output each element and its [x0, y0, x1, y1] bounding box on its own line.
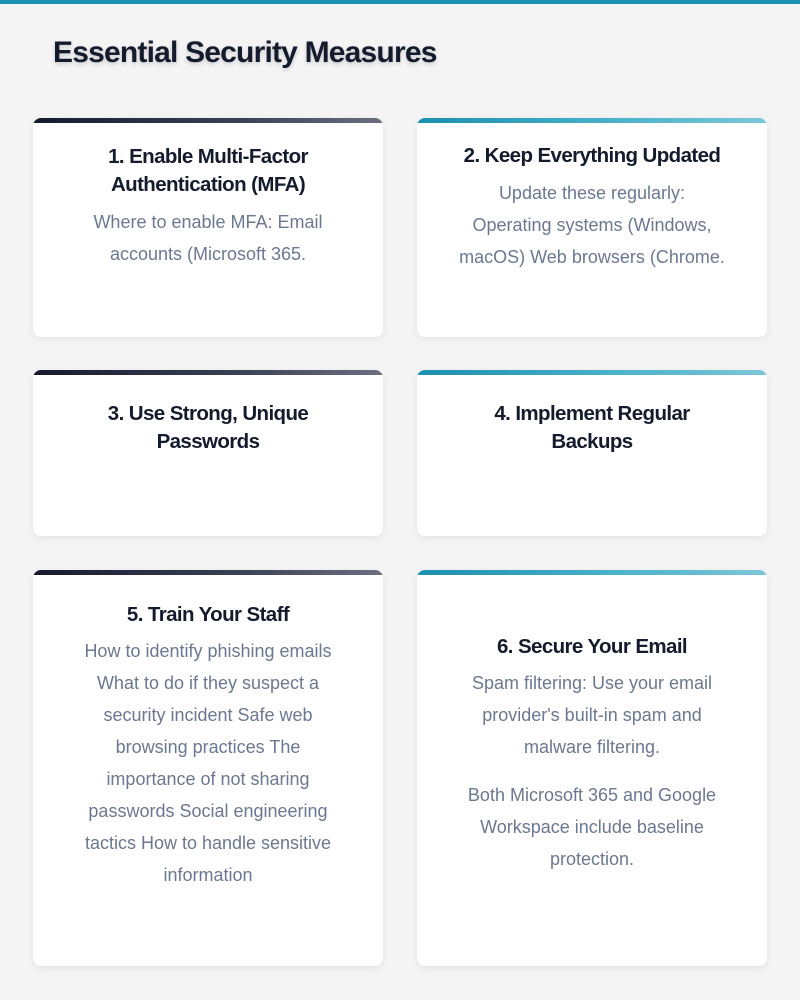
heading: email: 6. Secure Your Email — [497, 635, 687, 658]
text: MFA: Where to enable MFA: Email accounts (Microsoft 365. — [93, 212, 323, 264]
text: staff: How to identify phishing emails What to do if they suspect a security incident Safe web browsing practices The importance of not sharing passwords Social engineering tactics How to handle sensitive information — [84, 641, 332, 885]
heading: backups: Backups — [551, 430, 633, 453]
panel: passwords — [33, 370, 383, 536]
heading: MFA: Authentication (MFA) — [111, 173, 305, 196]
text: email — [468, 673, 716, 869]
heading: updates: 2. Keep Everything Updated — [464, 144, 720, 167]
heading: MFA — [108, 145, 308, 196]
heading: MFA: 1. Enable Multi-Factor — [108, 145, 308, 168]
heading: passwords: Passwords — [157, 430, 259, 453]
text: updates — [459, 183, 725, 267]
heading: backups — [494, 402, 690, 453]
text: email: Spam filtering: Use your email provider's built-in spam and malware filtering. — [472, 673, 712, 757]
panel: email — [417, 570, 767, 966]
heading: passwords: 3. Use Strong, Unique — [108, 402, 308, 425]
text: email: Both Microsoft 365 and Google Workspace include baseline protection. — [468, 785, 716, 869]
title: Essential Security Measures — [53, 36, 437, 69]
heading: backups: 4. Implement Regular — [494, 402, 690, 425]
panel: staff — [33, 570, 383, 966]
heading: passwords — [108, 402, 308, 453]
text: updates: macOS) Web browsers (Chrome. — [459, 247, 725, 267]
heading: staff: 5. Train Your Staff — [127, 603, 289, 626]
panel: MFA — [33, 118, 383, 337]
panel: backups — [417, 370, 767, 536]
text: updates: Operating systems (Windows, — [472, 215, 712, 235]
text: updates: Update these regularly: — [499, 183, 685, 203]
panel: updates — [417, 118, 767, 337]
